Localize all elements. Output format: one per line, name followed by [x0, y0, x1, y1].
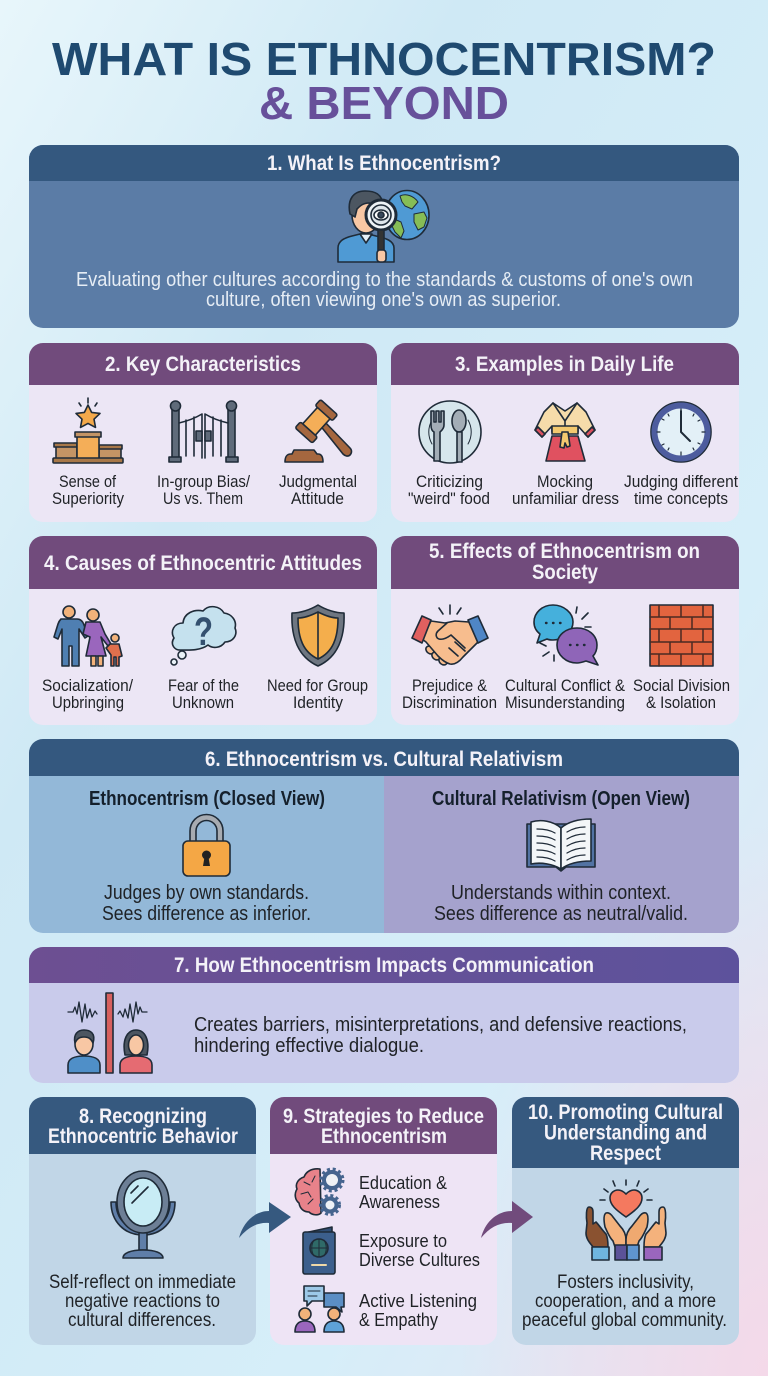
- column: closed view: Judges by own standards.: [104, 882, 309, 904]
- icon: gavel: [285, 400, 352, 462]
- labels 3: Mocking: [537, 472, 593, 491]
- description 10: cooperation, and a more: [535, 1291, 716, 1312]
- heading 10: Understanding and: [544, 1122, 707, 1144]
- title: WHAT IS ETHNOCENTRISM?: [52, 33, 716, 85]
- icon: padlock: [183, 814, 230, 876]
- labels 4: Need for Group: [267, 676, 368, 695]
- heading 5: 5. Effects of Ethnocentrism on: [429, 540, 700, 563]
- icon: clock: [651, 402, 711, 462]
- description 1: [76, 269, 693, 311]
- labels 2: Superiority: [52, 489, 124, 508]
- panel 9: strategies: [270, 1097, 497, 1345]
- title: & BEYOND: [259, 77, 509, 129]
- icon: brick wall: [650, 605, 713, 666]
- arrow: from panel 8 to panel 9: [239, 1202, 291, 1238]
- panel 2: key characteristics: [29, 343, 377, 522]
- labels 5: [402, 676, 730, 712]
- text: education and awareness: [359, 1173, 447, 1212]
- column: open view: Sees difference as neutral/valid.: [434, 903, 688, 925]
- heading 1: 1. What Is Ethnocentrism?: [267, 152, 501, 175]
- column: open view: Understands within context.: [451, 882, 671, 904]
- labels 4: Unknown: [172, 693, 234, 712]
- icon: person with magnifier and globe: [338, 190, 429, 262]
- labels 5: Prejudice &: [412, 676, 488, 695]
- heading 7: 7. How Ethnocentrism Impacts Communication: [174, 954, 594, 977]
- labels 2: Sense of: [59, 472, 116, 491]
- icon: plate with fork and spoon: [419, 401, 481, 463]
- heading 9: [283, 1105, 484, 1148]
- labels 2: In-group Bias/: [157, 472, 250, 491]
- heading 4: 4. Causes of Ethnocentric Attitudes: [44, 552, 362, 575]
- heading 10: Respect: [590, 1142, 661, 1165]
- heading 2: 2. Key Characteristics: [105, 353, 301, 376]
- icon: brain and gears: [295, 1169, 343, 1215]
- panel 3: examples in daily life: [391, 343, 739, 522]
- icon: thought cloud: [171, 607, 236, 665]
- panel 6: ethnocentrism vs cultural relativism: [29, 739, 739, 933]
- labels 4: Identity: [293, 693, 343, 712]
- description 8: negative reactions to: [65, 1291, 220, 1312]
- labels 4: Socialization/: [42, 676, 133, 695]
- column: closed view: [89, 788, 325, 925]
- heading 10: [528, 1101, 723, 1165]
- icon: passport: [303, 1227, 335, 1274]
- text: education and awareness: Awareness: [359, 1192, 440, 1212]
- labels 5: Cultural Conflict &: [505, 676, 626, 695]
- icon: traditional robe: [535, 403, 595, 461]
- text: exposure to diverse cultures: Diverse Cultures: [359, 1250, 480, 1270]
- arrow: from panel 9 to panel 10: [481, 1201, 533, 1238]
- heading 10: 10. Promoting Cultural: [528, 1101, 723, 1124]
- icon: family: [54, 606, 122, 666]
- description 8: [49, 1272, 236, 1331]
- icon: thought cloud: ?: [194, 610, 213, 654]
- icon: handshake: [412, 605, 488, 667]
- labels 4: Fear of the: [168, 676, 239, 695]
- icon: podium with star: [53, 398, 123, 463]
- column: open view: [432, 788, 690, 925]
- labels 5: Discrimination: [402, 693, 497, 712]
- text: active listening and empathy: Active Listening: [359, 1291, 477, 1311]
- icon: open book: [527, 819, 595, 871]
- labels 3: "weird" food: [408, 489, 490, 508]
- heading 9: 9. Strategies to Reduce: [283, 1105, 484, 1128]
- labels 2: [52, 472, 357, 508]
- panel 8: recognizing behavior: [29, 1097, 256, 1345]
- column: open view: Cultural Relativism (Open View): [432, 788, 690, 810]
- icon: hands holding heart: [586, 1180, 666, 1260]
- description 7: hindering effective dialogue.: [194, 1035, 424, 1057]
- heading 6: 6. Ethnocentrism vs. Cultural Relativism: [205, 748, 563, 771]
- labels 3: [408, 472, 738, 508]
- description 8: Self-reflect on immediate: [49, 1272, 236, 1293]
- labels 2: Judgmental: [279, 472, 357, 491]
- description 10: peaceful global community.: [522, 1310, 727, 1331]
- column: closed view: Ethnocentrism (Closed View): [89, 788, 325, 810]
- labels 5: Misunderstanding: [505, 693, 625, 712]
- labels 3: unfamiliar dress: [512, 489, 619, 508]
- icon: closed gate: [169, 401, 238, 462]
- description 1: Evaluating other cultures according to the standards & customs of one's own: [76, 269, 693, 291]
- labels 3: time concepts: [634, 489, 728, 508]
- description 7: Creates barriers, misinterpretations, and defensive reactions,: [194, 1014, 687, 1036]
- description 8: cultural differences.: [68, 1310, 216, 1331]
- heading 8: 8. Recognizing: [79, 1105, 207, 1128]
- description 1: culture, often viewing one's own as superior.: [206, 289, 561, 311]
- labels 2: Attitude: [291, 489, 344, 508]
- description 10: Fosters inclusivity,: [557, 1272, 694, 1293]
- description 10: [522, 1272, 727, 1331]
- icon: two people talking: [295, 1286, 344, 1332]
- labels 4: [42, 676, 368, 712]
- heading 3: 3. Examples in Daily Life: [455, 353, 674, 376]
- heading 8: Ethnocentric Behavior: [48, 1125, 238, 1148]
- icon: shield: [292, 605, 344, 666]
- text: education and awareness: Education &: [359, 1173, 447, 1193]
- text: exposure to diverse cultures: [359, 1231, 480, 1270]
- heading 8: [48, 1105, 238, 1148]
- panel 4: causes: [29, 536, 377, 725]
- heading 9: Ethnocentrism: [321, 1125, 447, 1148]
- labels 3: Judging different: [624, 472, 738, 491]
- labels 5: Social Division: [633, 676, 730, 695]
- heading 5: [429, 540, 700, 584]
- text: exposure to diverse cultures: Exposure to: [359, 1231, 447, 1251]
- panel 1: what is ethnocentrism: [29, 145, 739, 328]
- labels 2: Us vs. Them: [163, 489, 243, 508]
- heading 5: Society: [532, 561, 598, 584]
- title: [52, 33, 716, 129]
- labels 4: Upbringing: [52, 693, 124, 712]
- labels 5: & Isolation: [646, 693, 716, 712]
- text: active listening and empathy: [359, 1291, 477, 1330]
- description 7: [194, 1014, 687, 1057]
- text: active listening and empathy: & Empathy: [359, 1310, 438, 1330]
- icon: mirror: [111, 1171, 175, 1258]
- panel 10: promoting understanding: [512, 1097, 739, 1345]
- panel 7: communication: [29, 947, 739, 1083]
- labels 3: Criticizing: [416, 472, 483, 491]
- icon: clashing speech bubbles: [534, 605, 598, 665]
- panel 5: effects: [391, 536, 739, 725]
- column: closed view: Sees difference as inferior.: [102, 903, 311, 925]
- icon: two people separated by wall with sound waves: [68, 993, 152, 1073]
